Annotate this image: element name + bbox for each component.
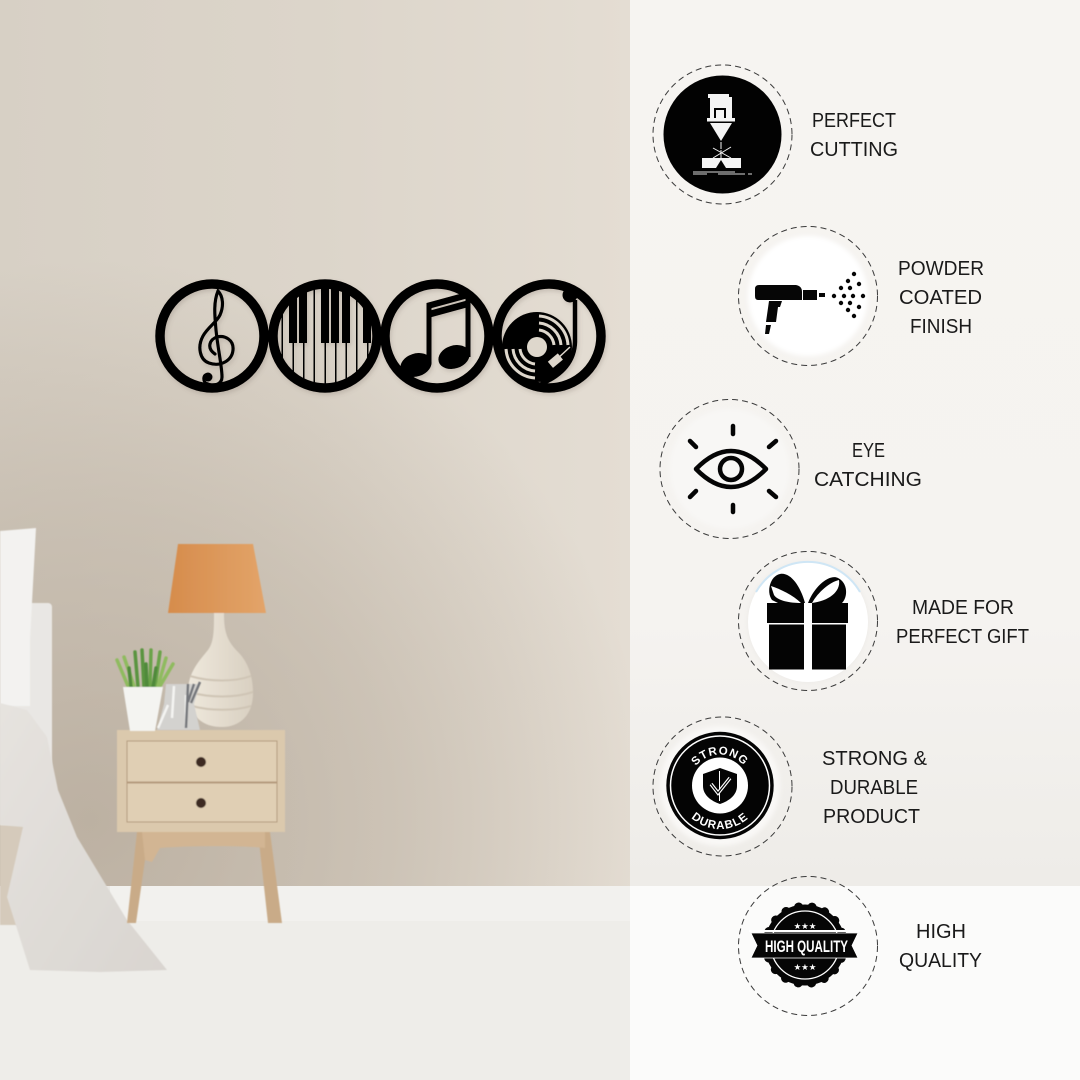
room photo background [0, 0, 630, 1080]
label: eye catching [814, 440, 922, 491]
icon: high quality seal: HIGH QUALITY [765, 938, 848, 956]
blanket [0, 703, 167, 972]
label: powder coated finish [898, 258, 984, 338]
icon: high quality seal: ★★★ [794, 963, 817, 973]
disc: vinyl record [497, 284, 601, 388]
label: made for perfect gift [896, 597, 1029, 648]
disc: beamed notes [385, 284, 489, 388]
side table [117, 730, 285, 923]
label: powder coated finish: POWDER [898, 258, 984, 280]
label: made for perfect gift: PERFECT GIFT [896, 626, 1029, 648]
icon: high quality seal: ★★★ [794, 922, 817, 932]
label: strong and durable product: DURABLE [830, 777, 918, 799]
feature: strong and durable product [652, 716, 928, 856]
feature: made for perfect gift [738, 552, 1029, 690]
icon: strong durable badge: STRONG [692, 746, 748, 765]
label: powder coated finish: FINISH [910, 316, 972, 338]
glass jar and clips [157, 682, 200, 730]
feature: eye catching [660, 400, 922, 538]
wall art: four music discs [160, 280, 601, 393]
right panel upper [630, 0, 1080, 886]
label: high quality [899, 921, 982, 972]
label: strong and durable product: STRONG & [822, 748, 928, 770]
potted plant [117, 650, 173, 731]
label: made for perfect gift: MADE FOR [912, 597, 1014, 619]
label: perfect cutting: CUTTING [810, 139, 898, 161]
label: perfect cutting [810, 110, 898, 161]
label: high quality: HIGH [916, 921, 966, 943]
feature: high quality [738, 876, 982, 1016]
disc: treble clef [160, 284, 264, 388]
label: eye catching: CATCHING [814, 469, 922, 491]
icon: spray gun [738, 226, 878, 366]
table lamp [168, 544, 266, 727]
bed [0, 528, 52, 925]
icon: high quality seal [738, 876, 878, 1016]
disc: piano keys [273, 280, 377, 393]
right panel lower [630, 886, 1080, 1080]
label: high quality: QUALITY [899, 950, 982, 972]
feature: perfect cutting [653, 65, 898, 204]
label: strong and durable product: PRODUCT [823, 806, 920, 828]
label: eye catching: EYE [852, 440, 885, 462]
icon: strong durable badge [652, 716, 792, 856]
icon: eye with rays [660, 400, 799, 538]
label: strong and durable product [822, 748, 928, 828]
icon: gift box [738, 552, 878, 690]
label: perfect cutting: PERFECT [812, 110, 896, 132]
feature: powder coated finish [738, 226, 984, 366]
icon: strong durable badge: DURABLE [692, 812, 748, 830]
icon: laser cutter [653, 65, 792, 204]
label: powder coated finish: COATED [899, 287, 982, 309]
